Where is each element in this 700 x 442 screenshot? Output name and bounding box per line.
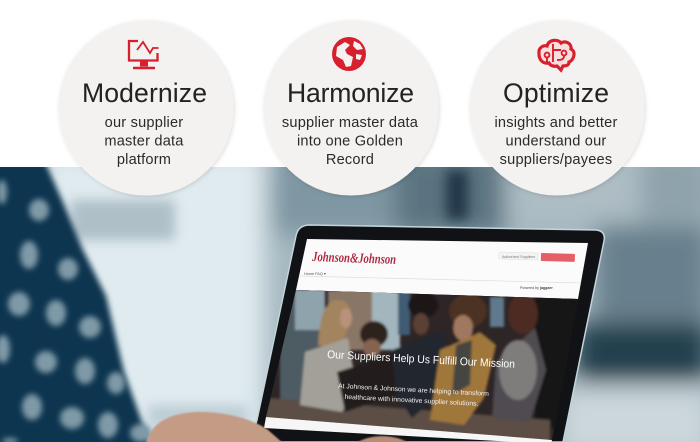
icon: monitor with pulse line <box>129 41 158 68</box>
hero subtext: healthcare with innovative supplier solutions. <box>344 394 479 408</box>
laptop <box>250 225 604 442</box>
hands on laptop <box>146 412 410 442</box>
person 1 <box>318 300 351 350</box>
Johnson and Johnson logo: Johnson&Johnson <box>311 250 396 268</box>
person 2 <box>360 321 388 347</box>
hero subtext: At Johnson & Johnson we are helping to transform <box>338 383 489 398</box>
website hero photo: team at table <box>262 288 585 442</box>
text: Modernize description: platform <box>117 152 171 168</box>
navigation: Home FAQ ▾ <box>304 272 326 276</box>
hero heading: Our Suppliers Help Us Fulfill Our Mission <box>327 349 515 371</box>
panel: Optimize <box>470 20 644 196</box>
login button <box>541 253 575 262</box>
text: Modernize description: master data <box>104 134 184 150</box>
person 3 <box>408 292 438 318</box>
person 5 <box>508 294 538 334</box>
text: Optimize description: understand our <box>506 134 606 150</box>
text: Harmonize description: supplier master data <box>282 115 419 131</box>
icon: brain with circuit <box>539 40 574 70</box>
icon: globe <box>332 37 366 71</box>
login field <box>499 252 538 260</box>
heading: Optimize: Optimize <box>503 78 609 108</box>
laptop frame <box>250 225 604 442</box>
text: Optimize description: suppliers/payees <box>500 152 612 168</box>
website header <box>296 239 588 299</box>
person in polka dot dress <box>0 160 152 442</box>
heading: Modernize: Modernize <box>82 78 207 108</box>
panel: Modernize <box>58 20 234 196</box>
login field: Authorized Suppliers <box>502 255 535 259</box>
text: Optimize description: insights and better <box>494 115 618 131</box>
background photo: blurred office <box>0 150 700 442</box>
text: Harmonize description: into one Golden <box>297 134 403 150</box>
white strip below hero <box>264 417 552 442</box>
text: Harmonize description: Record <box>326 152 374 168</box>
panel: Harmonize <box>264 20 438 196</box>
text: Modernize description: our supplier <box>105 115 183 131</box>
person 4 <box>449 294 487 328</box>
powered by: Powered by jaggaer <box>520 286 553 290</box>
heading: Harmonize: Harmonize <box>287 78 414 108</box>
